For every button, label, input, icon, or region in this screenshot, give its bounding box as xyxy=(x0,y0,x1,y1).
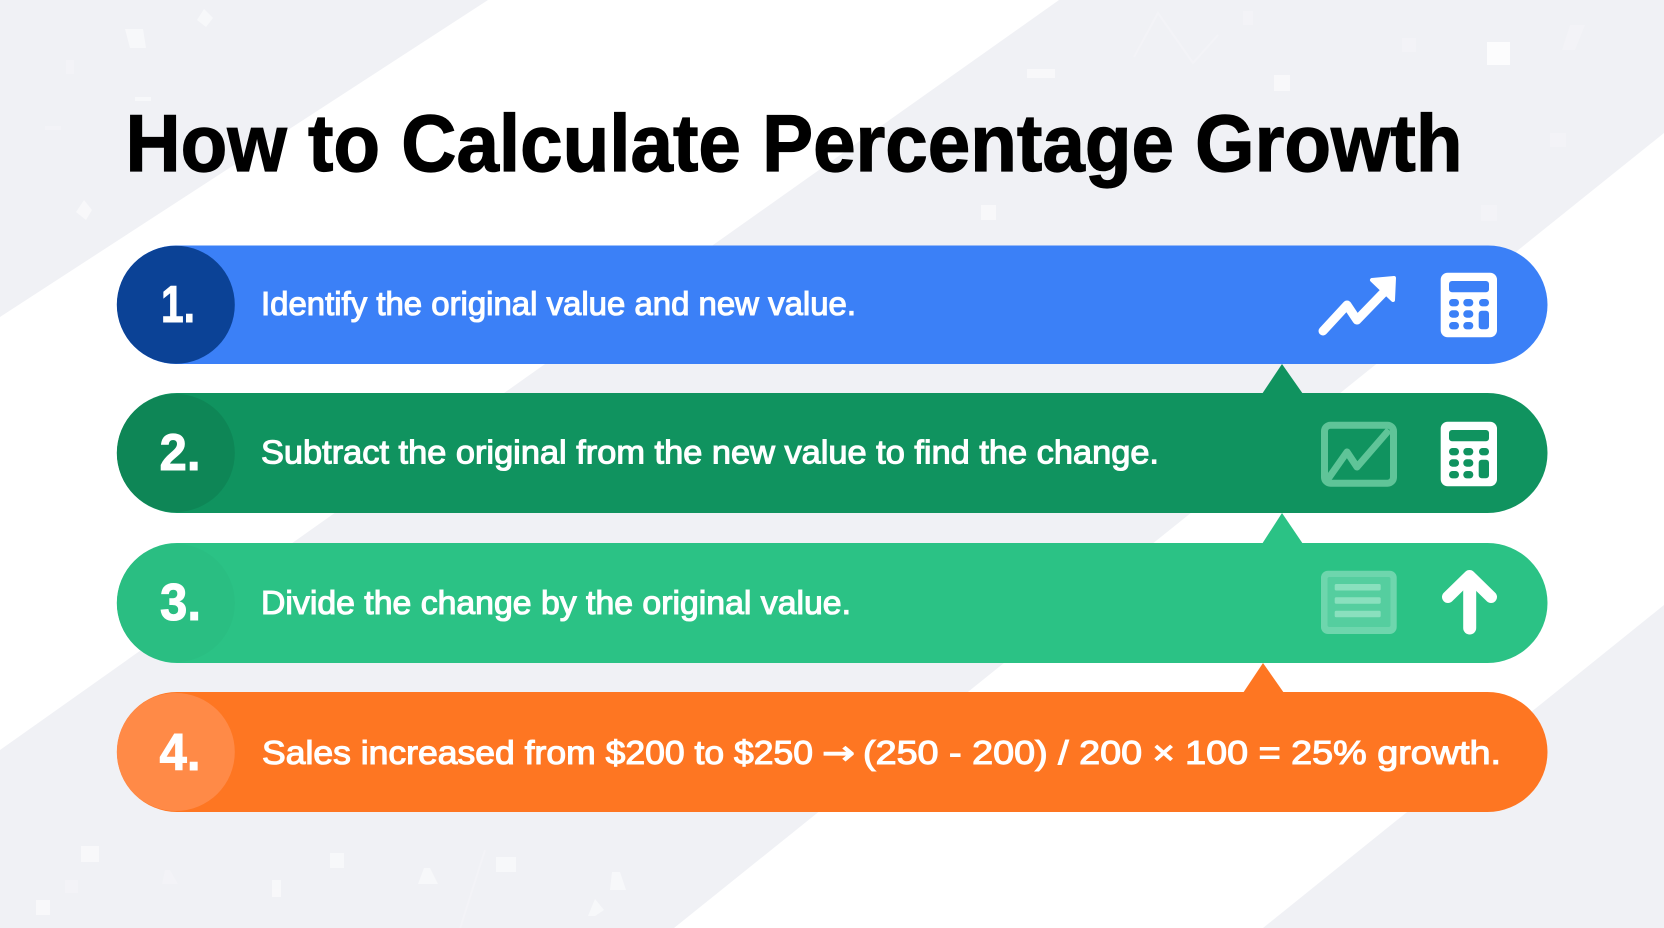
step 4 number: 4. xyxy=(160,724,200,782)
step 1 bar xyxy=(117,246,1548,364)
step 2 bar xyxy=(117,393,1548,513)
connector arrow: step 2 to 3 xyxy=(1262,513,1303,544)
step 3 bar xyxy=(117,543,1548,663)
step 2 number: 2. xyxy=(160,424,200,482)
step 4 text: Sales increased from $200 to $250 xyxy=(262,734,813,771)
step 1 panel xyxy=(117,246,1547,364)
step 1 number: 1. xyxy=(161,276,195,334)
icon: line chart xyxy=(1324,425,1394,483)
icon: document lines xyxy=(1321,571,1397,634)
step 2 panel xyxy=(117,364,1547,513)
step 4 number badge xyxy=(117,693,235,811)
step 1 text: Identify the original value and new value. xyxy=(261,285,856,322)
step 4 text: → xyxy=(822,733,855,772)
step 3 number badge xyxy=(117,544,235,662)
step 2 text: Subtract the original from the new value to find the change. xyxy=(261,434,1159,470)
step 4 text xyxy=(262,733,1501,772)
step 3 text: Divide the change by the original value. xyxy=(261,584,851,621)
icon: calculator xyxy=(1441,273,1497,337)
step 4 panel xyxy=(117,663,1547,812)
step 4 text: (250 - 200) / 200 × 100 = 25% growth. xyxy=(863,734,1501,771)
title: How to Calculate Percentage Growth xyxy=(126,99,1462,189)
connector arrow: step 3 to 4 xyxy=(1243,663,1284,693)
icon: trend arrow xyxy=(1323,278,1394,331)
step 3 number: 3. xyxy=(160,574,201,632)
icon: up arrow xyxy=(1448,576,1491,628)
step 2 number badge xyxy=(117,394,235,512)
step 3 panel xyxy=(117,513,1547,663)
step 1 number badge xyxy=(117,246,235,364)
step 4 bar xyxy=(117,692,1548,812)
icon: calculator xyxy=(1441,422,1497,486)
connector arrow: step 1 to 2 xyxy=(1262,364,1303,394)
